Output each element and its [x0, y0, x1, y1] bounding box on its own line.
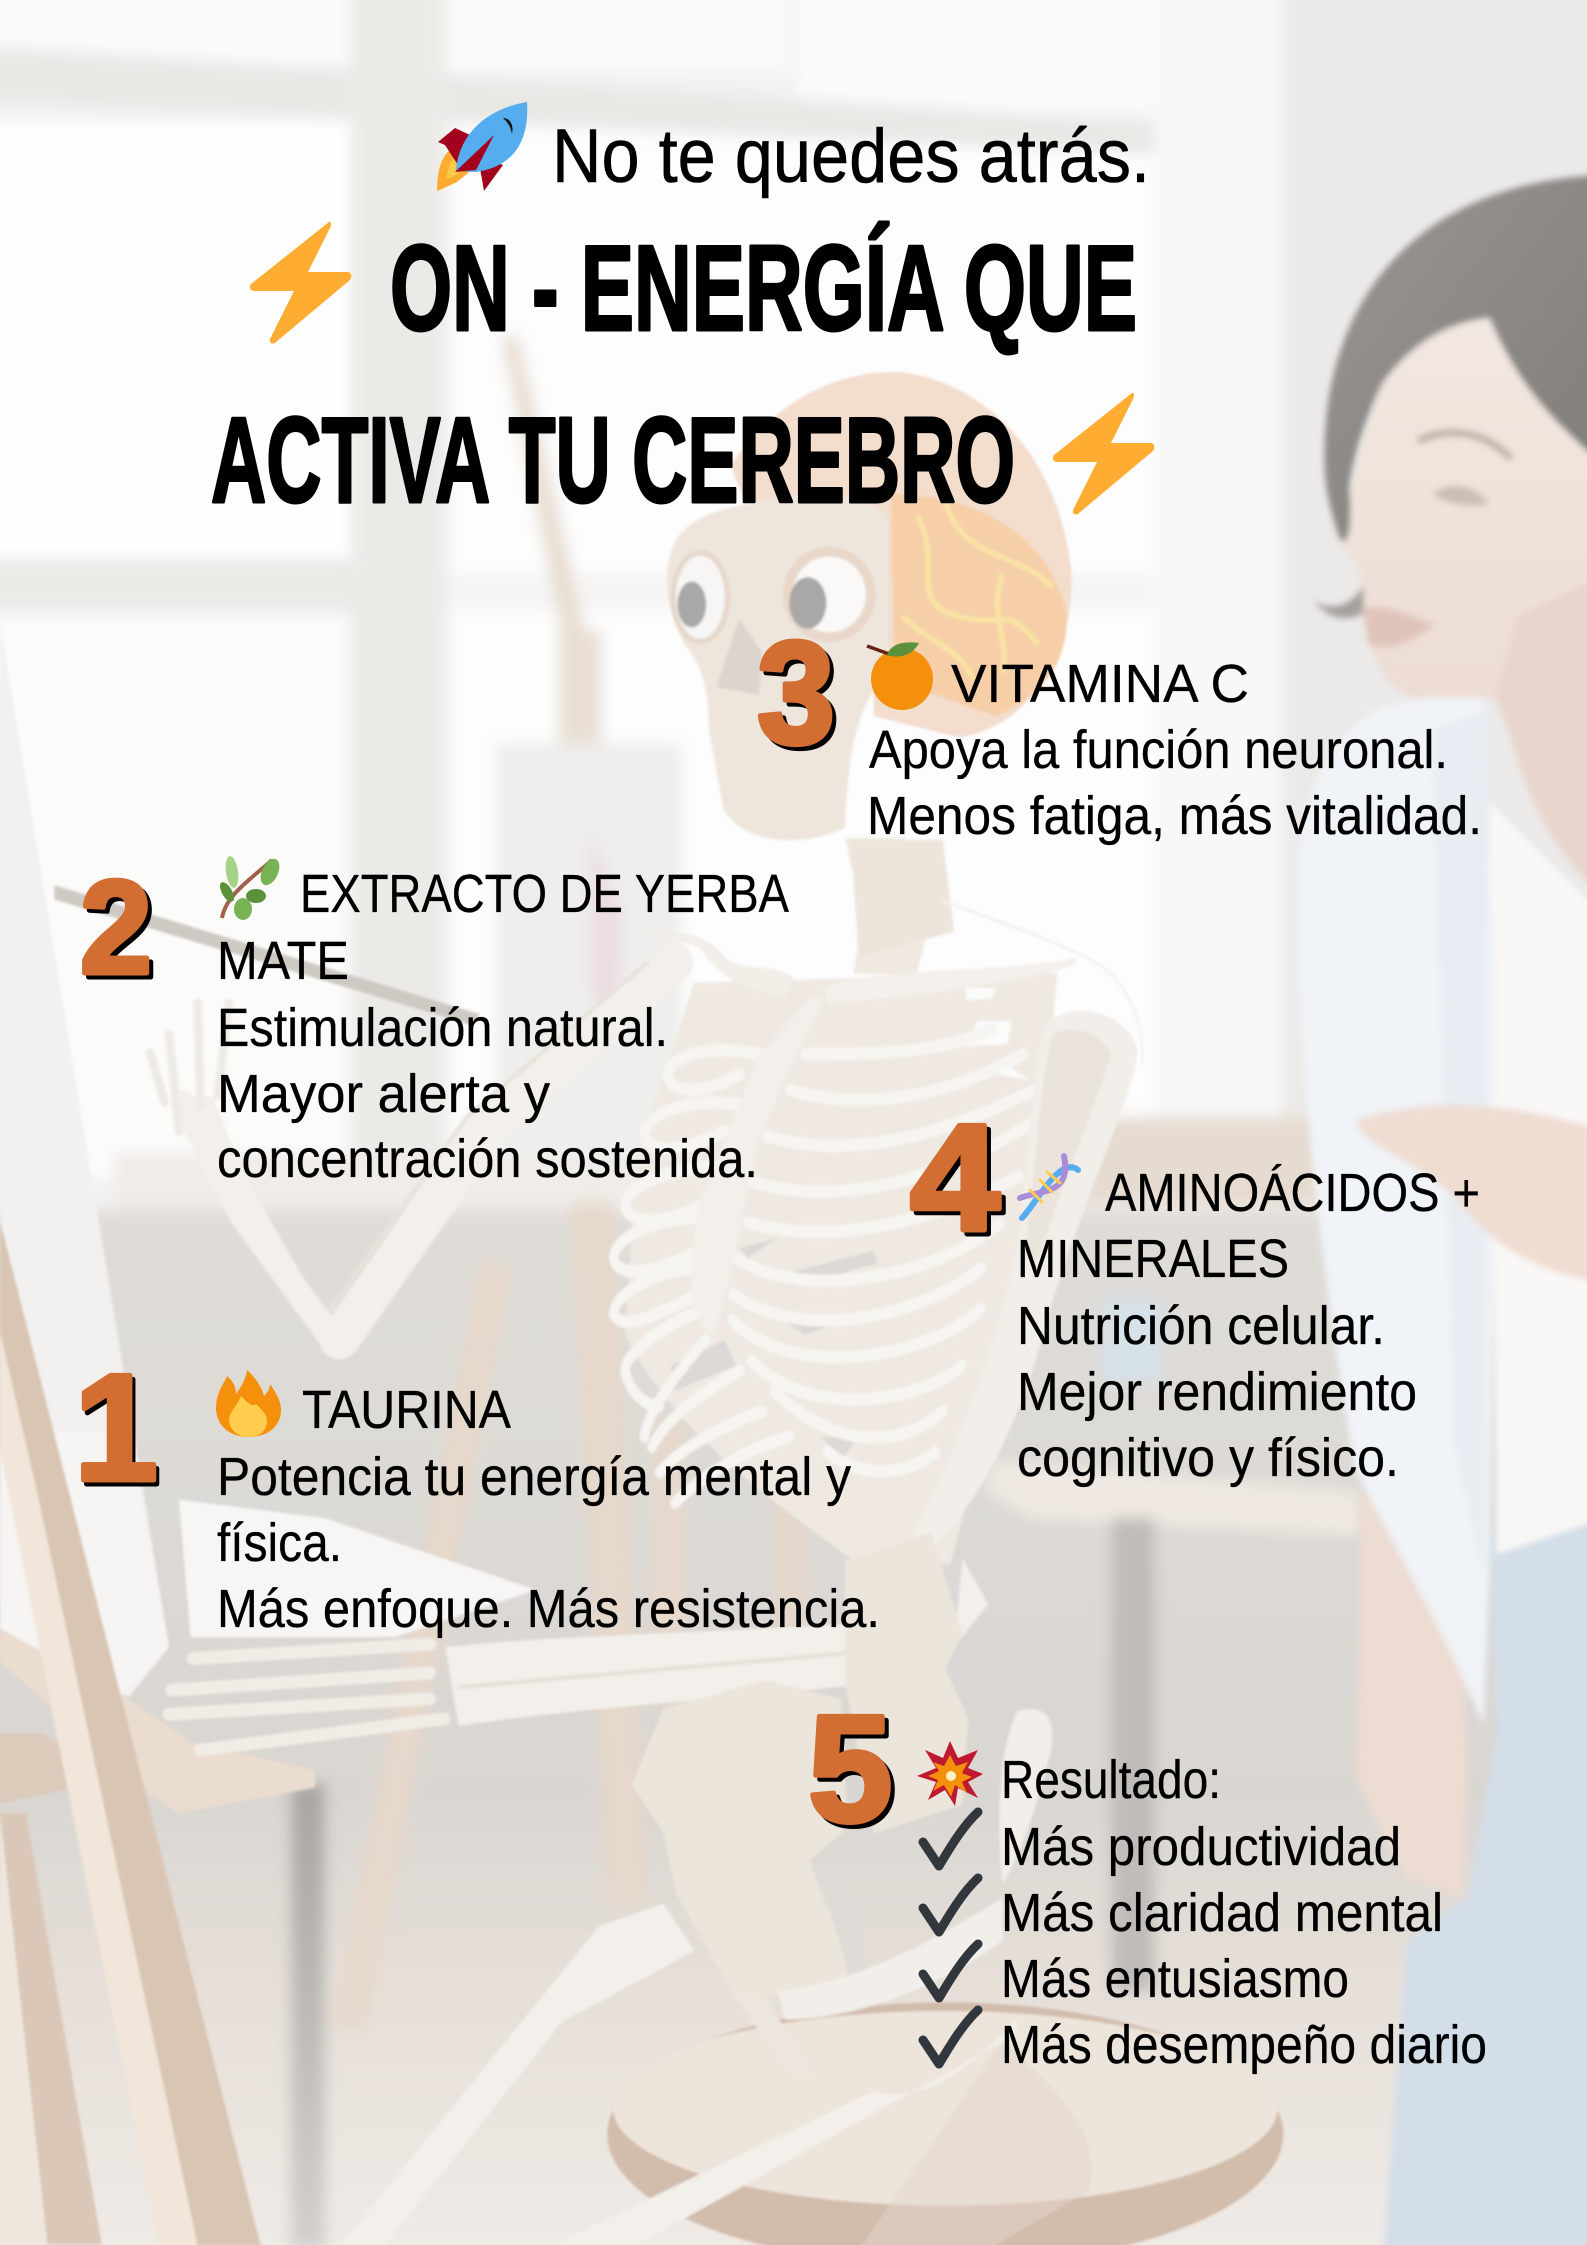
panel: vitamina C [757, 611, 1482, 846]
description [867, 720, 1482, 846]
heading [1017, 1163, 1480, 1289]
heading: VITAMINA C [951, 654, 1249, 714]
heading: Resultado: [1001, 1750, 1221, 1810]
description: Más enfoque. Más resistencia. [217, 1579, 880, 1639]
description: Menos fatiga, más vitalidad. [867, 786, 1482, 846]
panel: taurina [74, 1343, 880, 1639]
icon: dna [1020, 1156, 1078, 1218]
description [217, 998, 758, 1189]
title line 1: ON - ENERGÍA QUE [390, 220, 1137, 356]
description: Mayor alerta y [217, 1064, 550, 1124]
lower spine [845, 1533, 968, 1833]
number 2: 2 [80, 854, 152, 1002]
header line with rocket [437, 102, 1150, 199]
raised arm [150, 963, 673, 1339]
number 4: 4 [914, 1097, 1004, 1267]
lower room [115, 1153, 1375, 1239]
description: Potencia tu energía mental y [217, 1447, 851, 1507]
left easel and painting [0, 623, 536, 2245]
panel: extracto de yerba mate [80, 854, 789, 1189]
heading: EXTRACTO DE YERBA [300, 864, 789, 924]
pelvis [632, 1680, 854, 1998]
wooden furniture [570, 1203, 647, 1905]
icon: branch [217, 855, 283, 920]
legs [338, 1904, 695, 2245]
raised hand of the woman [1356, 1105, 1587, 1282]
result 1: Más productividad [1001, 1817, 1401, 1877]
panel: aminoácidos + minerales [910, 1093, 1480, 1488]
woman at the right [1296, 175, 1587, 2245]
description [1017, 1296, 1417, 1488]
back easel and canvas [501, 337, 602, 702]
number 2: 2 [84, 858, 156, 1006]
results list [923, 1812, 1487, 2075]
description: Apoya la función neuronal. [869, 720, 1448, 780]
heading: AMINOÁCIDOS + [1105, 1163, 1480, 1223]
number 1: 1 [77, 1347, 161, 1517]
icon: orange [867, 642, 933, 710]
result 3: Más entusiasmo [1001, 1949, 1349, 2009]
icon: lightning bolt right [1053, 393, 1154, 514]
result 2: Más claridad mental [1001, 1883, 1443, 1943]
window panes [0, 0, 1157, 1182]
description: Mejor rendimiento [1017, 1362, 1417, 1422]
number 5: 5 [812, 1688, 897, 1858]
skeleton figure [150, 372, 1283, 2245]
description: Estimulación natural. [217, 998, 668, 1058]
description: cognitivo y físico. [1017, 1428, 1399, 1488]
check 1 [923, 1812, 978, 1866]
panel: resultado [808, 1684, 1487, 2075]
result 4: Más desempeño diario [1001, 2015, 1487, 2075]
description: concentración sostenida. [217, 1129, 758, 1189]
brain [730, 372, 1072, 738]
title line 2: ACTIVA TU CEREBRO [211, 392, 1015, 528]
neck and face [1343, 286, 1587, 897]
facial features [1418, 433, 1511, 458]
skull [667, 494, 888, 840]
icon: lightning bolt left [250, 222, 351, 343]
shirt and cardigan [1490, 802, 1587, 1554]
number 1: 1 [74, 1343, 158, 1513]
lower arm and hand [445, 1558, 988, 1726]
heading: MINERALES [1017, 1229, 1289, 1289]
number 3: 3 [761, 615, 839, 778]
stool [607, 2002, 1283, 2245]
icon: rocket [437, 102, 527, 191]
forearm and jeans [1356, 1492, 1468, 1898]
heading [217, 864, 789, 991]
heading: MATE [217, 931, 349, 991]
description: física. [217, 1513, 342, 1573]
number 5: 5 [808, 1684, 893, 1854]
neck [845, 838, 931, 974]
check 4 [923, 2010, 978, 2064]
description [217, 1447, 880, 1639]
number 4: 4 [910, 1093, 1000, 1263]
icon: explosion [917, 1741, 983, 1806]
icon: fire [216, 1370, 281, 1437]
check 3 [923, 1944, 978, 1998]
hair [1324, 175, 1587, 542]
heading: TAURINA [302, 1380, 511, 1440]
torso in detail [614, 840, 1142, 1575]
subtitle text: No te quedes atrás. [552, 114, 1150, 199]
check 2 [923, 1878, 978, 1932]
number 3: 3 [757, 611, 835, 774]
title [211, 220, 1154, 528]
description: Nutrición celular. [1017, 1296, 1385, 1356]
